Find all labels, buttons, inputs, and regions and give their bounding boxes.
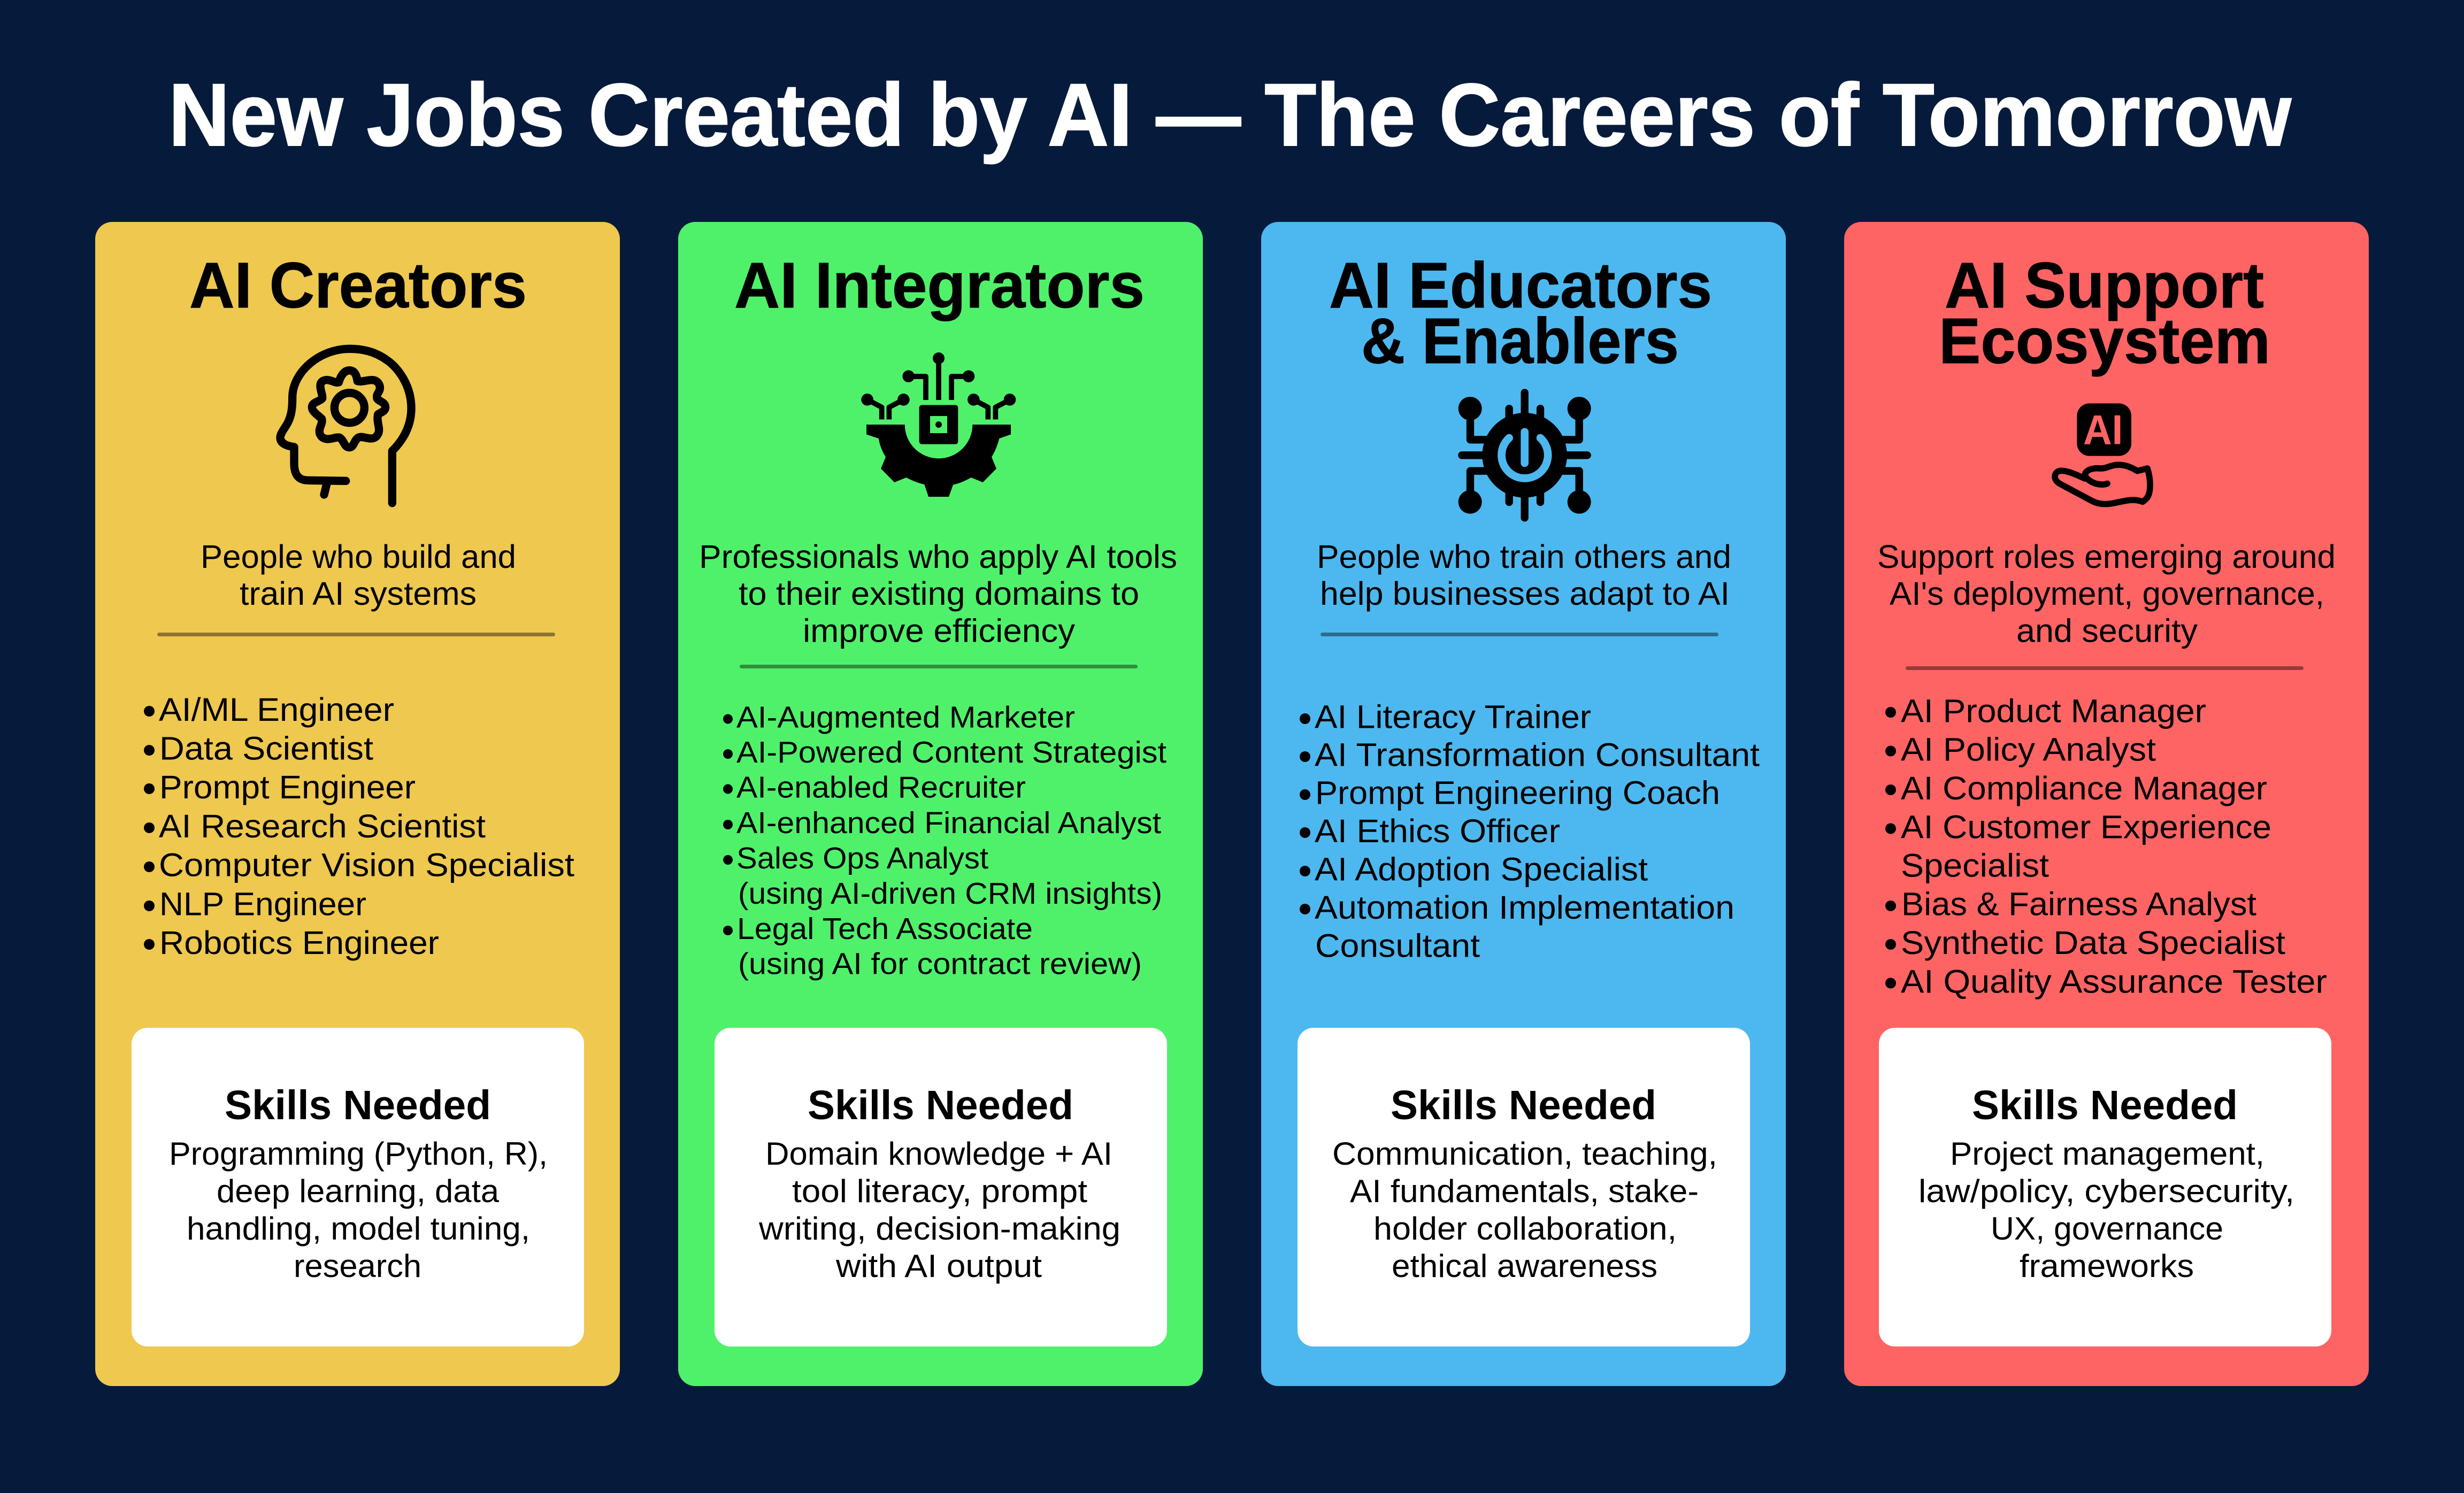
description: help businesses adapt to AI <box>1320 575 1730 612</box>
skills box: tool literacy, prompt <box>792 1173 1087 1209</box>
heading: AI Educators & Enablers: & Enablers <box>1361 304 1679 377</box>
job list: Computer Vision Specialist <box>159 847 574 883</box>
job list: Robotics Engineer <box>159 925 439 961</box>
job list <box>1300 698 1760 964</box>
description: People who build and <box>201 538 516 575</box>
description: AI's deployment, governance, <box>1890 575 2324 612</box>
job list: AI Policy Analyst <box>1901 732 2156 768</box>
skills box <box>132 1028 584 1346</box>
job list: Automation Implementation <box>1315 889 1734 926</box>
description <box>1317 538 1731 612</box>
skills box: Skills Needed <box>1391 1082 1656 1128</box>
heading: AI Integrators: AI Integrators <box>734 249 1145 321</box>
job list <box>1885 693 2327 1000</box>
skills box <box>715 1028 1167 1346</box>
description: Professionals who apply AI tools <box>699 538 1177 575</box>
panel: AI Integrators <box>678 222 1203 1386</box>
description: to their existing domains to <box>739 575 1139 612</box>
job list: NLP Engineer <box>159 886 366 922</box>
icon: AI badge over open hand: AI <box>2083 406 2123 453</box>
job list: Bias & Fairness Analyst <box>1901 886 2256 922</box>
job list: AI Product Manager <box>1901 693 2206 729</box>
job list: Prompt Engineering Coach <box>1315 774 1720 811</box>
skills box: research <box>294 1248 421 1284</box>
description: improve efficiency <box>803 613 1076 649</box>
skills box: Communication, teaching, <box>1332 1136 1717 1172</box>
heading: AI Creators: AI Creators <box>189 249 527 321</box>
skills box: UX, governance <box>1991 1211 2223 1246</box>
job list: Consultant <box>1315 927 1480 964</box>
job list: (using AI for contract review) <box>738 946 1142 981</box>
job list: Data Scientist <box>159 730 373 767</box>
heading: AI Support Ecosystem <box>1939 249 2270 377</box>
skills box <box>1879 1028 2331 1346</box>
skills box: Skills Needed <box>225 1082 491 1128</box>
description: and security <box>2016 613 2198 649</box>
icon: power button circuit <box>1459 393 1591 518</box>
skills box: holder collaboration, <box>1373 1211 1677 1246</box>
icon: head with gear <box>280 349 411 503</box>
skills box: Programming (Python, R), <box>169 1136 548 1172</box>
job list: Specialist <box>1901 847 2049 883</box>
job list <box>144 691 574 961</box>
skills box: Domain knowledge + AI <box>765 1136 1112 1172</box>
job list: Legal Tech Associate <box>737 912 1033 945</box>
skills box: with AI output <box>835 1248 1042 1284</box>
job list: AI Adoption Specialist <box>1315 851 1648 888</box>
heading: AI Educators & Enablers <box>1329 249 1712 377</box>
description <box>699 538 1177 649</box>
job list: AI Ethics Officer <box>1315 813 1560 849</box>
job list: AI Literacy Trainer <box>1315 698 1591 735</box>
job list: AI-Powered Content Strategist <box>736 735 1166 769</box>
heading: AI Support Ecosystem: Ecosystem <box>1939 304 2270 377</box>
job list: AI-enabled Recruiter <box>736 770 1026 804</box>
skills box: frameworks <box>2020 1248 2194 1284</box>
skills box: Project management, <box>1950 1136 2265 1172</box>
icon: gear with circuit chip <box>861 352 1016 497</box>
panel: AI Support Ecosystem <box>1844 222 2369 1386</box>
job list: AI Quality Assurance Tester <box>1901 964 2327 1000</box>
job list: AI-Augmented Marketer <box>736 701 1075 734</box>
heading: AI Support Ecosystem: AI Support <box>1945 249 2264 321</box>
job list <box>723 701 1166 981</box>
description: Support roles emerging around <box>1877 538 2336 575</box>
skills box: Skills Needed <box>1972 1082 2238 1128</box>
heading: AI Educators & Enablers: AI Educators <box>1329 249 1712 321</box>
skills box: law/policy, cybersecurity, <box>1918 1173 2294 1209</box>
description <box>1877 538 2336 649</box>
title: New Jobs Created by AI — The Careers of Tomorrow <box>168 66 2292 165</box>
job list: (using AI-driven CRM insights) <box>738 876 1162 910</box>
panel: AI Creators <box>95 222 620 1386</box>
job list: AI Customer Experience <box>1901 809 2271 845</box>
skills box: Skills Needed <box>808 1082 1073 1128</box>
skills box: handling, model tuning, <box>187 1211 530 1246</box>
job list: AI Compliance Manager <box>1901 770 2267 806</box>
skills box: ethical awareness <box>1392 1248 1657 1284</box>
description: People who train others and <box>1317 538 1731 575</box>
skills box: AI fundamentals, stake- <box>1350 1173 1699 1209</box>
job list: AI-enhanced Financial Analyst <box>736 806 1161 840</box>
description <box>201 538 516 612</box>
skills box: writing, decision-making <box>758 1211 1120 1246</box>
job list: Prompt Engineer <box>159 769 416 805</box>
job list: AI/ML Engineer <box>159 691 394 728</box>
job list: Synthetic Data Specialist <box>1901 925 2285 961</box>
icon: AI badge over open hand <box>2055 403 2150 504</box>
panel: AI Educators & Enablers <box>1261 222 1786 1386</box>
skills box <box>1298 1028 1750 1346</box>
job list: AI Research Scientist <box>159 808 486 844</box>
description: train AI systems <box>240 575 477 612</box>
skills box: deep learning, data <box>217 1173 500 1209</box>
job list: AI Transformation Consultant <box>1315 737 1760 773</box>
job list: Sales Ops Analyst <box>736 841 988 875</box>
